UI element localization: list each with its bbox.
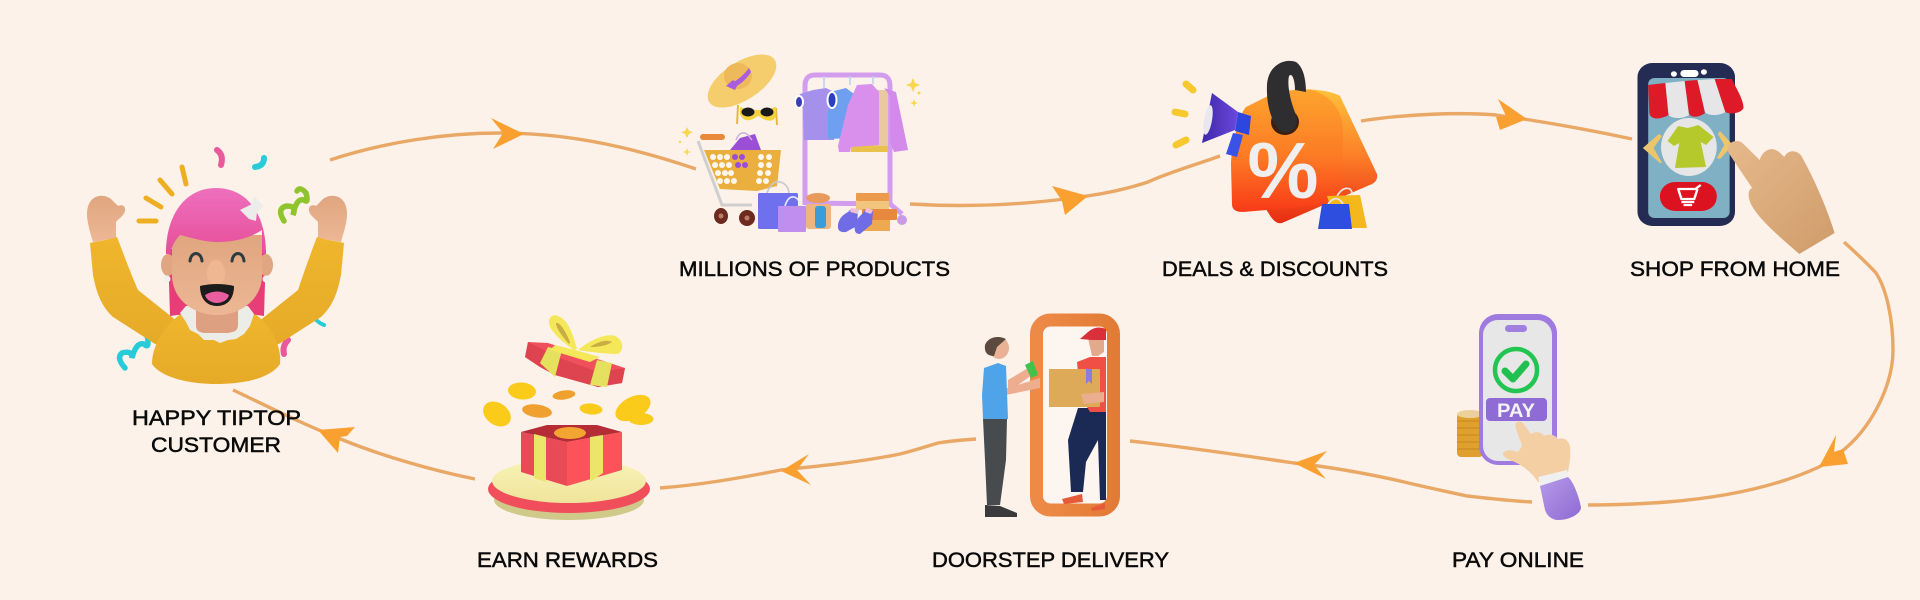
label: pay online: PAY ONLINE — [1452, 549, 1584, 572]
label: earn rewards: EARN REWARDS — [477, 549, 658, 572]
label: happy tiptop customer: CUSTOMER — [151, 434, 281, 457]
label: doorstep delivery: DOORSTEP DELIVERY — [932, 549, 1169, 572]
label: deals and discounts: DEALS & DISCOUNTS — [1162, 258, 1388, 281]
shoes — [838, 208, 873, 234]
bow — [549, 315, 622, 362]
coins — [478, 381, 655, 432]
arrow: products to deals — [910, 156, 1220, 215]
clothes rack — [805, 75, 902, 214]
eyes — [190, 254, 244, 261]
back tag — [1260, 89, 1377, 223]
shopping bags — [758, 182, 806, 232]
arrow: delivery to rewards — [660, 439, 976, 488]
sleeve — [1540, 477, 1581, 520]
hands — [87, 196, 125, 242]
percent: % — [1247, 126, 1319, 215]
arrow: shop to pay — [1588, 242, 1893, 505]
confetti dashes — [120, 150, 324, 368]
coins — [1457, 410, 1483, 457]
arrow: rewards to customer — [233, 390, 475, 479]
courier — [1062, 328, 1106, 511]
torso — [152, 313, 280, 384]
product circle — [1661, 118, 1717, 176]
gift — [806, 193, 831, 229]
open box — [521, 425, 622, 486]
lid — [525, 342, 625, 387]
parcel — [1049, 369, 1104, 407]
check badge — [1495, 349, 1537, 391]
arrow: pay to delivery — [1130, 441, 1532, 502]
front tag — [1231, 89, 1343, 212]
notch — [1505, 325, 1527, 332]
label: happy tiptop customer — [132, 407, 301, 457]
arms — [90, 237, 178, 345]
icon: earn rewards — [478, 315, 655, 520]
pay button: PAY — [1497, 401, 1535, 422]
sparkles — [679, 78, 920, 156]
arrow: customer to products — [330, 118, 696, 169]
boxes — [856, 193, 897, 231]
collar — [180, 306, 254, 343]
sunglasses — [737, 105, 777, 125]
mouth — [200, 284, 234, 306]
arrow: deals to shop — [1361, 99, 1632, 139]
icon: pay online — [1457, 314, 1581, 520]
label: shop from home: SHOP FROM HOME — [1630, 258, 1840, 281]
pedestal — [488, 459, 650, 520]
awning — [1648, 79, 1744, 118]
back hair — [168, 240, 266, 316]
icon: millions of products — [679, 44, 920, 234]
pointing hand — [1727, 141, 1835, 254]
phone screen — [1648, 78, 1730, 218]
speaker — [1671, 69, 1707, 77]
neck — [196, 310, 238, 333]
pay button — [1486, 398, 1547, 422]
chevrons — [1643, 134, 1662, 163]
hole — [1271, 109, 1299, 135]
megaphone — [1201, 93, 1251, 157]
icon: shop from home — [1637, 63, 1835, 254]
phone body — [1637, 63, 1735, 226]
t-shirt — [1667, 125, 1714, 168]
label: happy tiptop customer: HAPPY TIPTOP — [132, 407, 301, 430]
mini bags — [1318, 188, 1367, 229]
shopping cart — [698, 133, 781, 226]
nose — [207, 260, 225, 286]
garments — [794, 76, 908, 152]
hat — [699, 44, 785, 118]
ears and earrings — [161, 254, 175, 276]
icon: deals and discounts — [1175, 61, 1377, 229]
icon: doorstep delivery — [982, 320, 1114, 517]
label: millions of products: MILLIONS OF PRODUCTS — [679, 258, 950, 281]
ring — [1267, 61, 1306, 132]
face — [172, 235, 262, 315]
hair — [166, 188, 266, 254]
phone — [1479, 314, 1557, 465]
rack wheel — [897, 215, 907, 225]
phone frame door — [1036, 320, 1114, 510]
dashes — [1175, 84, 1193, 145]
bow — [240, 196, 264, 221]
cart glyph — [1678, 185, 1701, 205]
icon: happy customer — [87, 150, 347, 384]
red cart button — [1660, 182, 1717, 211]
customer person — [982, 337, 1040, 517]
hand — [1503, 422, 1570, 482]
cuff — [1538, 470, 1569, 488]
